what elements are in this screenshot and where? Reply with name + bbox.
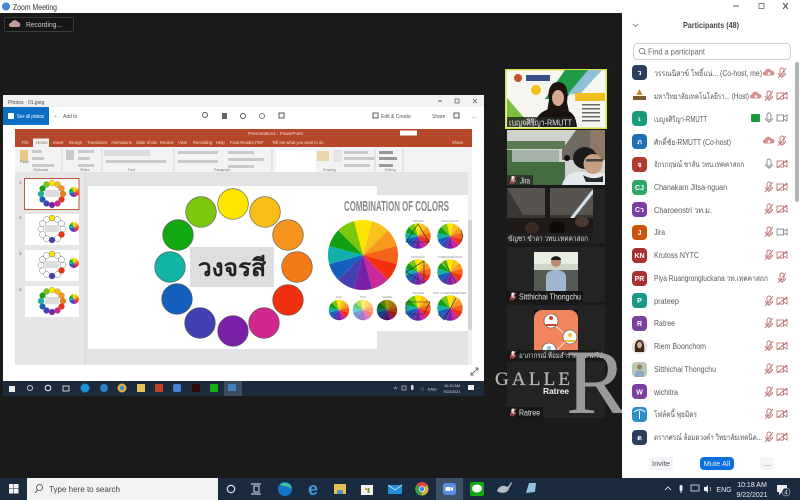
- photos toolbar: Edit & Create: [381, 114, 411, 120]
- row: Sitthichai Thongchu: [654, 365, 716, 374]
- row: Ratree: [654, 319, 675, 328]
- row: ดรากศรณ์ ล้อมดวงคำ วิทยาลัยเทคนิค...: [654, 432, 762, 442]
- row: prateep: [654, 297, 680, 306]
- row: เบญจศิริญา-RMUTT: [654, 115, 707, 124]
- name label: Ratree: [519, 408, 540, 418]
- powerpoint ribbon: Editing: [385, 168, 396, 172]
- powerpoint title bar: Design: [69, 140, 83, 145]
- photos toolbar: [54, 99, 477, 120]
- row: [632, 362, 787, 377]
- tint shade tone wheels: SHADE: [382, 295, 392, 299]
- combination wheels: TRIADIC: [412, 219, 424, 223]
- powerpoint title bar: Insert: [53, 140, 64, 145]
- photos toolbar: Share: [432, 114, 446, 120]
- search box: [27, 478, 218, 500]
- combination wheels: TETRADIC: [411, 255, 425, 259]
- powerpoint ribbon: [15, 147, 472, 172]
- powerpoint title bar: Share: [452, 140, 464, 145]
- row: Riem Boonchom: [654, 342, 706, 351]
- photos toolbar: Add to: [63, 114, 78, 120]
- combination title: COMBINATION OF COLORS: [344, 198, 449, 215]
- row: Piya Ruangrongluckana วท.เทคคาสถก: [654, 274, 768, 283]
- see all photos button: [3, 107, 49, 125]
- combination wheels: [401, 219, 467, 325]
- row: ภ: [637, 139, 642, 146]
- row: wichitra: [653, 388, 678, 397]
- name label: อาภากรณ์ ห้อมสำราญ สตรศรีษ์: [519, 351, 603, 360]
- photos app: [526, 483, 536, 493]
- inner taskbar: [3, 381, 484, 396]
- powerpoint title bar: Home: [36, 140, 48, 145]
- colour circle ring: [155, 189, 312, 346]
- row: [632, 430, 787, 445]
- powerpoint title bar: File: [22, 140, 29, 145]
- expand icon: [471, 368, 478, 375]
- row: ด: [637, 435, 642, 442]
- photos toolbar: ...: [472, 114, 476, 120]
- video tile 6: [507, 362, 605, 418]
- thumbnail 2: 2: [19, 215, 22, 220]
- powerpoint title bar: Animations: [111, 140, 132, 145]
- row: [632, 293, 787, 308]
- tint shade tone wheels: TINT: [360, 295, 366, 299]
- name label: Sitthichai Thongchu: [519, 292, 581, 302]
- slide thumbnails panel: [15, 172, 85, 365]
- powerpoint title bar: Foxit Reader PDF: [230, 140, 264, 145]
- combination wheels: ANALOGOUS: [441, 219, 459, 223]
- search box: Type here to search: [49, 484, 120, 494]
- photos title: Photos - 01.jpeg: [8, 100, 45, 106]
- row: P: [637, 298, 642, 305]
- row: ศักดิ์ชัย-RMUTT (Co-host): [654, 136, 731, 147]
- invite button: Invite: [652, 459, 670, 468]
- video tile 2: [507, 130, 605, 186]
- thumbnail 2: [19, 214, 81, 245]
- thumbnail 4: [19, 286, 81, 317]
- powerpoint ribbon: Clipboard: [33, 168, 48, 172]
- row: เ: [638, 116, 641, 123]
- row: [632, 202, 787, 217]
- row: [632, 180, 787, 195]
- cortana: [227, 485, 235, 493]
- powerpoint title bar: Presentation1 - PowerPoint: [248, 131, 304, 136]
- chrome: [415, 482, 428, 496]
- powerpoint title bar: Help: [216, 140, 225, 145]
- store: [361, 485, 373, 495]
- row: Cว: [635, 207, 644, 214]
- row: KN: [634, 253, 645, 260]
- zoom title bar: Zoom Meeting: [13, 3, 57, 12]
- powerpoint title bar: Recording: [193, 140, 213, 145]
- row: จ: [637, 162, 642, 169]
- start button: [9, 484, 18, 494]
- row: [632, 384, 787, 399]
- participants scrollbar: [795, 62, 799, 202]
- search box: [634, 44, 790, 60]
- thumbnail 1: [19, 178, 81, 210]
- row: Krutoss NYTC: [654, 251, 699, 260]
- panel heading: [633, 20, 739, 30]
- combination wheels: COMPLEMENTARY: [437, 255, 463, 259]
- name label: Jira: [520, 176, 530, 186]
- mute all button: Mute All: [704, 459, 731, 468]
- row: วรรณนิสาข์ โพธิ์แน่... (Co-host, me): [654, 67, 762, 78]
- row: [632, 316, 787, 331]
- row: โฟล์คนี้ พุธมิตร: [654, 408, 698, 419]
- video tile 3: [507, 188, 605, 243]
- row: [632, 248, 787, 263]
- photos toolbar: +: [54, 114, 57, 120]
- invite button: [649, 457, 673, 470]
- powerpoint title bar: Review: [160, 140, 175, 145]
- recording badge: [4, 18, 74, 32]
- more button: [760, 457, 774, 470]
- row: [632, 157, 787, 172]
- system tray: 10:18 AM: [737, 482, 767, 489]
- row: [632, 111, 787, 126]
- powerpoint ribbon: Paste: [20, 160, 29, 164]
- row: PR: [635, 276, 644, 283]
- row: ว: [638, 70, 642, 77]
- row: [632, 339, 787, 354]
- search box: Find a participant: [648, 48, 706, 56]
- row: [632, 88, 787, 103]
- inner taskbar: 10:19 AM: [444, 384, 460, 388]
- zoom title bar: [0, 0, 800, 13]
- recording badge: Recording...: [26, 20, 62, 29]
- mail: [388, 485, 402, 494]
- centre label: วงจรสี: [198, 254, 266, 282]
- inner taskbar: ENG: [428, 386, 437, 392]
- powerpoint window: [15, 129, 472, 365]
- video tile 5: [507, 305, 605, 360]
- row: W: [636, 390, 643, 396]
- powerpoint title bar: View: [178, 140, 188, 145]
- powerpoint ribbon: Slides: [80, 168, 90, 172]
- inner taskbar: ◁: [420, 386, 424, 392]
- powerpoint ribbon: Drawing: [323, 168, 336, 172]
- paint app: [497, 482, 512, 493]
- inner taskbar: 9/22/2021: [444, 390, 460, 394]
- system tray: 9/22/2021: [736, 492, 768, 499]
- powerpoint ribbon: Font: [128, 168, 135, 172]
- powerpoint title bar: Transitions: [87, 140, 107, 145]
- name label: ขัญชา ขำลา วทบ.เทคคาสถก: [508, 234, 588, 243]
- row: [632, 271, 786, 286]
- video tile 1: [505, 69, 607, 129]
- row: [632, 225, 787, 240]
- thumbnail 3: [19, 250, 81, 281]
- row: [632, 407, 787, 422]
- row: Charoenstri วท.ม.: [654, 206, 712, 215]
- file explorer: [334, 484, 346, 494]
- tint shade tone wheels: HUE: [336, 295, 342, 299]
- powerpoint title bar: Slide Show: [136, 140, 158, 145]
- powerpoint ribbon: Paragraph: [214, 168, 230, 172]
- row: J: [638, 230, 642, 237]
- row: R: [637, 321, 642, 328]
- powerpoint title bar: [15, 129, 472, 147]
- thumbnail 4: 4: [19, 287, 22, 292]
- thumbnail 3: 3: [19, 251, 22, 256]
- main colour wheel: [316, 208, 410, 302]
- slide scrollbar: [468, 172, 472, 365]
- windows taskbar: [0, 478, 800, 500]
- see all photos button: See all photos: [17, 114, 44, 120]
- row: Chanakarn Jitsa-nguan: [654, 183, 727, 192]
- row: มหาวิทยาลัยเทคโนโลยีรา... (Host): [654, 91, 749, 101]
- thumbnail 1: 1: [19, 180, 22, 185]
- watermark: GALLE: [495, 369, 570, 390]
- row: [632, 134, 786, 149]
- more button: ...: [764, 459, 770, 468]
- row: จักรกฤษณ์ ชาลัน วทบ.เทคคาสถก: [654, 159, 744, 169]
- watermark: [495, 331, 628, 433]
- system tray: ENG: [716, 487, 732, 494]
- video tile 4: [507, 247, 605, 302]
- ie: e: [308, 479, 318, 499]
- participants panel: [622, 0, 800, 478]
- photos window: [3, 95, 484, 396]
- tint shade tone wheels: [325, 295, 401, 324]
- mute all button: [700, 457, 734, 470]
- row: [632, 65, 786, 80]
- row: Jira: [654, 228, 665, 237]
- line app: [470, 482, 484, 496]
- system tray: [665, 482, 790, 499]
- panel heading: Participants (48): [683, 20, 739, 30]
- task view: [251, 484, 261, 494]
- row: CJ: [635, 185, 644, 192]
- video tile 6: Ratree: [543, 387, 570, 396]
- zoom app: [436, 478, 463, 500]
- watermark: R: [566, 331, 628, 433]
- combination wheels: SQUARE: [412, 291, 424, 295]
- slide canvas: [88, 186, 468, 349]
- combination wheels: SPLIT COMPLEMENTARY: [433, 291, 467, 295]
- centre label: [190, 247, 274, 287]
- system tray: 4: [784, 490, 788, 496]
- powerpoint title bar: Tell me what you want to do: [272, 140, 324, 145]
- edge: [278, 482, 292, 496]
- name label: เบญจศิริญา-RMUTT: [509, 118, 572, 128]
